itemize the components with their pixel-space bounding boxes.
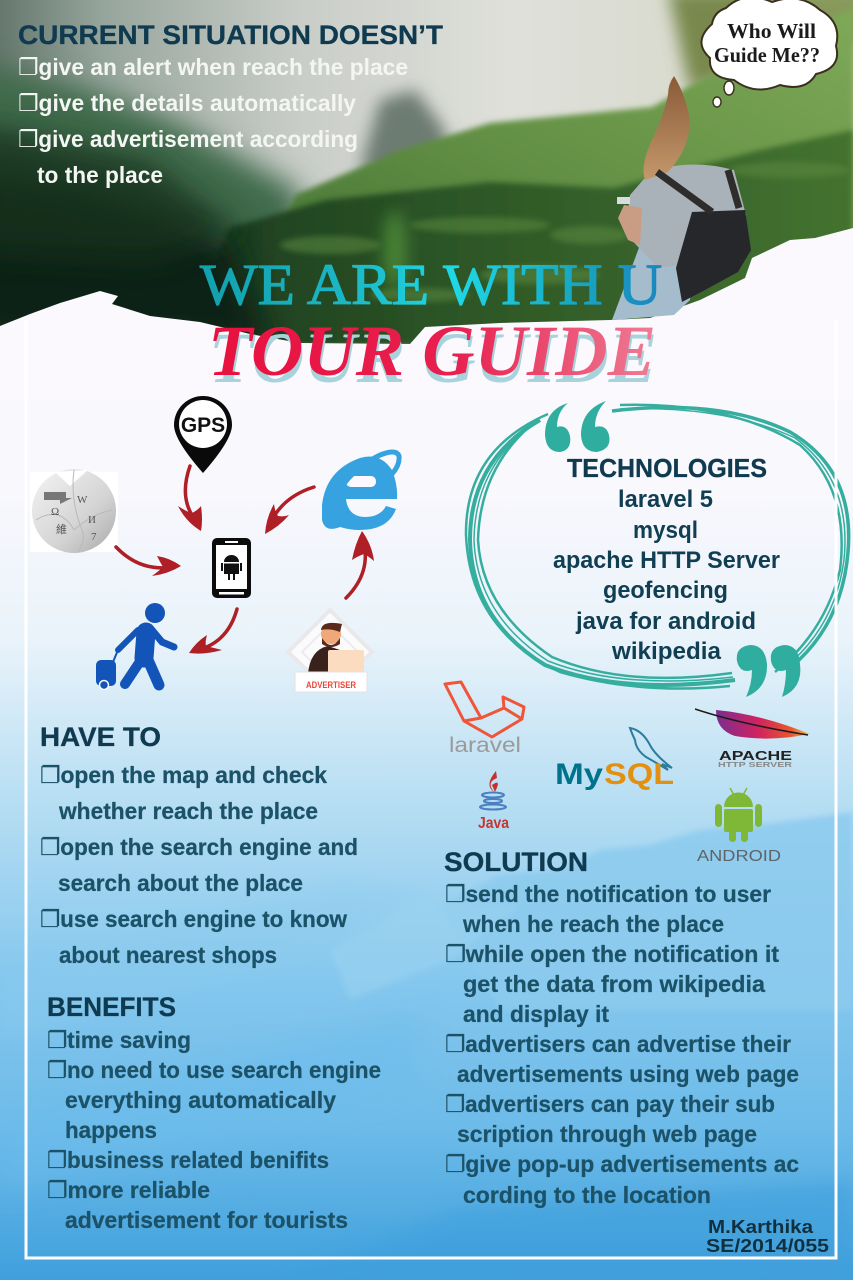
items: scription through web page (457, 1121, 757, 1147)
arrow: gps to phone (178, 466, 202, 531)
technologies text: TECHNOLOGIES (567, 453, 767, 483)
items: ❐send the notification to user (445, 881, 771, 907)
technologies text: geofencing (603, 577, 728, 604)
logo: android: ANDROID (697, 848, 781, 865)
items: ❐business related benifits (47, 1147, 329, 1173)
technologies text: apache HTTP Server (553, 547, 780, 574)
items: ❐no need to use search engine (47, 1057, 381, 1083)
items: everything automatically (65, 1087, 336, 1113)
icon: gps pin (174, 396, 232, 473)
title (200, 252, 662, 398)
quote mark: close (737, 645, 800, 697)
logo: apache: APACHE (719, 748, 792, 763)
shirt (625, 164, 746, 268)
icon: wikipedia globe (30, 469, 118, 553)
logo: android (697, 788, 781, 865)
icon: gps pin: GPS (181, 414, 225, 437)
phone (617, 197, 630, 204)
blue brush wash (0, 812, 853, 1280)
arrow: explorer to phone (265, 487, 314, 534)
icon: traveller with suitcase (96, 603, 174, 690)
items: ❐open the map and check (40, 762, 327, 788)
author credit: SE/2014/055 (706, 1236, 829, 1256)
we are with u: WE ARE WITH U (200, 252, 662, 317)
items: about nearest shops (59, 942, 277, 968)
icon: wikipedia globe: 7 (91, 531, 97, 543)
icon: advertiser badge: ADVERTISER (306, 680, 356, 691)
items: ❐give an alert when reach the place (18, 54, 408, 80)
panel: solution (444, 847, 799, 1208)
items: search about the place (58, 870, 303, 896)
panel: benefits (47, 992, 381, 1233)
icon: wikipedia globe: 維 (56, 523, 67, 536)
traveller woman (612, 76, 751, 320)
icon: advertiser badge (288, 610, 372, 692)
hair (644, 76, 690, 180)
icon: wikipedia globe: Ω (51, 506, 59, 518)
torn paper edge (0, 228, 853, 400)
items: ❐advertisers can advertise their (445, 1031, 791, 1057)
thought bubble (701, 0, 837, 107)
author credit (706, 1217, 829, 1256)
bubble text (714, 19, 820, 67)
logo: laravel (445, 682, 524, 757)
items: ❐advertisers can pay their sub (445, 1091, 775, 1117)
items: get the data from wikipedia (463, 971, 765, 997)
bubble text: Guide Me?? (714, 43, 820, 67)
items: happens (65, 1117, 157, 1143)
logo: apache: HTTP SERVER (718, 762, 792, 769)
icon: wikipedia globe: W (77, 494, 88, 506)
items: advertisements using web page (457, 1061, 799, 1087)
logo: java (478, 771, 509, 832)
logo: laravel: laravel (449, 734, 521, 757)
items (445, 881, 799, 1208)
items: ❐give pop-up advertisements ac (445, 1151, 799, 1177)
strap (657, 170, 739, 212)
arrow: wikipedia to phone (116, 547, 181, 576)
items (47, 1027, 381, 1233)
bubble text: Who Will (727, 19, 816, 43)
technologies text: wikipedia (611, 638, 722, 665)
technologies text: mysql (633, 517, 698, 544)
arm (618, 205, 642, 245)
technologies text (553, 453, 780, 665)
logo: apache (695, 709, 810, 769)
items: ❐give the details automatically (18, 90, 356, 116)
technologies text: laravel 5 (618, 486, 713, 513)
items: ❐use search engine to know (40, 906, 347, 932)
items: to the place (37, 162, 163, 188)
arrows (116, 466, 374, 654)
arrow: advertiser to explorer (346, 531, 374, 598)
logo: mysql: SQL (604, 758, 674, 791)
current situation text (18, 20, 444, 188)
photo: tea hills with traveller (0, 0, 853, 345)
technologies speech swirl (466, 401, 849, 697)
backpack (676, 210, 751, 302)
author credit: M.Karthika (708, 1217, 814, 1237)
items: ❐give advertisement according (18, 126, 358, 152)
logo: java: Java (478, 815, 509, 832)
logo: mysql: My (555, 758, 603, 791)
quote mark: open (545, 401, 610, 452)
items (40, 762, 358, 968)
panel: have to (40, 722, 358, 968)
items: whether reach the place (58, 798, 318, 824)
technologies text: java for android (575, 608, 756, 635)
items: ❐while open the notification it (445, 941, 779, 967)
heading: BENEFITS (47, 992, 176, 1022)
items: and display it (463, 1001, 609, 1027)
icon: internet explorer (322, 452, 399, 530)
items: ❐time saving (47, 1027, 191, 1053)
items: when he reach the place (462, 911, 724, 937)
heading: SOLUTION (444, 847, 588, 877)
items: cording to the location (463, 1182, 711, 1208)
tour guide: TOUR GUIDE (209, 318, 657, 398)
title: TOUR GUIDE (208, 311, 656, 391)
items: ❐open the search engine and (40, 834, 358, 860)
heading: CURRENT SITUATION DOESN’T (18, 20, 444, 50)
icon: android phone (212, 538, 251, 598)
logo: mysql (555, 728, 674, 791)
skirt (612, 245, 695, 320)
items: advertisement for tourists (65, 1207, 348, 1233)
arrow: phone to traveller (189, 609, 237, 654)
items: ❐more reliable (47, 1177, 210, 1203)
items (18, 54, 408, 188)
heading: HAVE TO (40, 722, 161, 752)
icon: wikipedia globe: И (88, 514, 96, 526)
